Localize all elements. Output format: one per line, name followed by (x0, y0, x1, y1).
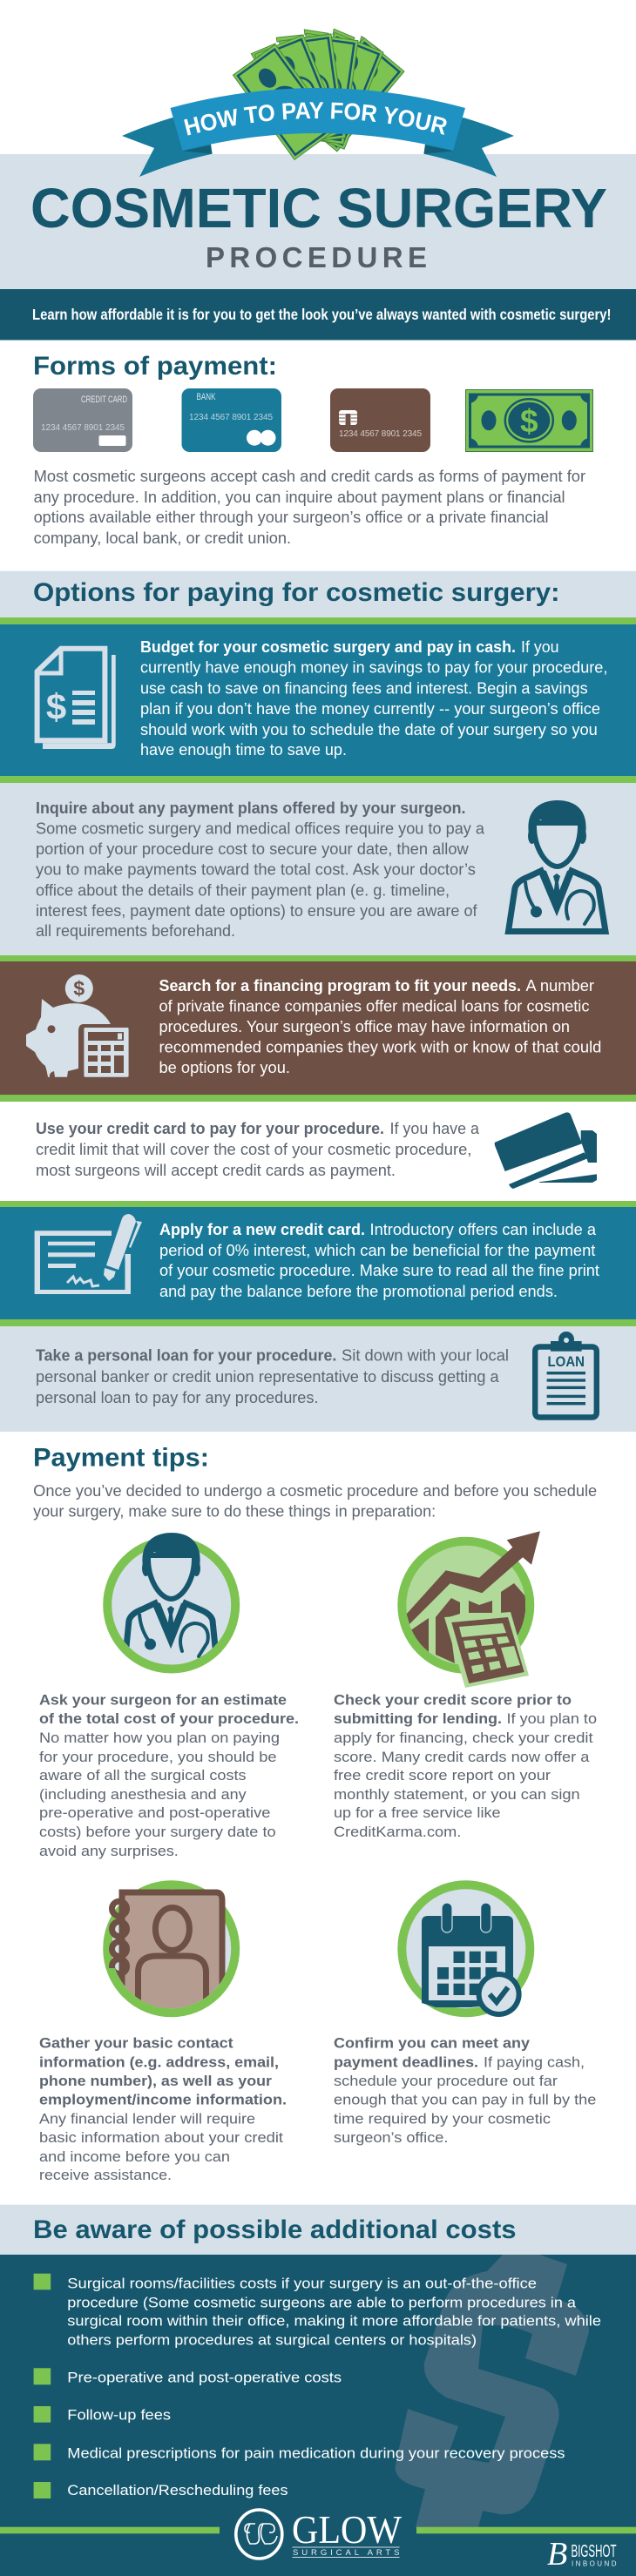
text block (159, 977, 601, 1076)
text block (34, 468, 585, 547)
text block: Take a personal loan for your procedure. (36, 1347, 336, 1365)
text block: Most cosmetic surgeons accept cash and credit cards as forms of payment for (34, 468, 585, 485)
icon: fan of money (233, 29, 404, 159)
tip text: surgeon’s office. (334, 2129, 448, 2146)
tip text: Ask your surgeon for an estimate (39, 1692, 287, 1709)
section: forms of payment (33, 352, 592, 547)
tip text: submitting for lending. (334, 1710, 502, 1727)
text block: any procedure. In addition, you can inquire about payment plans or financial (34, 489, 565, 506)
text block: Apply for a new credit card. (159, 1221, 365, 1238)
icon: calendar with check (402, 1885, 530, 2017)
icon: address book (107, 1885, 235, 2020)
tip text: enough that you can pay in full by the (334, 2092, 596, 2108)
icon: blue bank card: BANK (197, 392, 216, 402)
tip: contact information (39, 1885, 287, 2183)
text block: all requirements beforehand. (36, 922, 235, 940)
ribbon banner (122, 88, 514, 177)
text block: be options for you. (159, 1059, 290, 1076)
icon: loan clipboard: LOAN (547, 1353, 585, 1370)
logo: glow surgical arts (236, 2508, 402, 2559)
text block: Search for a financing program to fit your needs. (159, 977, 521, 995)
tip text: up for a free service like (334, 1804, 500, 1821)
tip text: of the total cost of your procedure. (39, 1710, 299, 1727)
tip text: avoid any surprises. (39, 1843, 179, 1859)
panel: surgeon payment plans (0, 776, 636, 955)
tip text (334, 1692, 597, 1840)
section heading: options: Options for paying for cosmetic surgery: (33, 578, 559, 607)
text block: portion of your procedure cost to secure your date, then allow (36, 840, 470, 858)
logo: bigshot inbound (547, 2536, 617, 2573)
intro text: Once you’ve decided to undergo a cosmetic procedure and before you schedule (33, 1482, 597, 1500)
icon: grey credit card: CREDIT CARD (81, 394, 127, 405)
heading: Forms of payment: (33, 352, 277, 381)
tip text: information (e.g. address, email, (39, 2054, 279, 2071)
text block: recommended companies they work with or know of that could (159, 1039, 601, 1056)
text block: personal banker or credit union representative to discuss getting a (36, 1368, 500, 1386)
panel: new credit card (0, 1201, 636, 1319)
icon: grey credit card (33, 388, 132, 452)
icon: piggy bank and calculator: $ (73, 977, 85, 1000)
text block: plan if you don’t have the money currently -- your surgeon’s office (140, 700, 600, 718)
text block: procedures. Your surgeon’s office may have information on (159, 1018, 570, 1035)
text block (36, 1120, 480, 1179)
icon: chart with calculator (402, 1531, 540, 1688)
intro text (33, 1482, 597, 1521)
tip text (334, 2035, 596, 2146)
text block (36, 1347, 509, 1406)
text block: should work with you to schedule the date of your surgery so you (140, 721, 598, 738)
icon: document with dollar: $ (46, 686, 66, 727)
tip text: schedule your procedure out far (334, 2073, 558, 2089)
tip text: If paying cash, (484, 2054, 585, 2071)
text block: A number (526, 977, 594, 995)
watermark dollar sign (396, 2255, 589, 2527)
text block: Budget for your cosmetic surgery and pay in cash. (140, 638, 516, 656)
text block: and pay the balance before the promotional period ends. (159, 1283, 558, 1300)
icon: document with dollar (37, 648, 116, 749)
bullet list (34, 2274, 601, 2498)
icon: dollar bill: $ (520, 403, 538, 439)
icon: piggy bank and calculator (26, 974, 129, 1077)
tip text: pre-operative and post-operative (39, 1804, 270, 1821)
bullet: facilities: surgical room within their office, making it more affordable for patients, while (67, 2313, 601, 2330)
text block: company, local bank, or credit union. (34, 529, 291, 547)
tip text (39, 1692, 299, 1859)
intro text: your surgery, make sure to do these things in preparation: (33, 1503, 436, 1521)
tip text: apply for financing, check your credit (334, 1730, 593, 1746)
intro banner (0, 289, 636, 341)
text block: Some cosmetic surgery and medical offices require you to pay a (36, 819, 485, 837)
icon: loan clipboard (535, 1332, 597, 1418)
header band (0, 28, 636, 289)
text block: credit limit that will cover the cost of your cosmetic procedure, (36, 1141, 471, 1158)
tip text: free credit score report on your (334, 1767, 551, 1784)
subtitle: PROCEDURE (206, 241, 427, 273)
tip text (39, 2035, 287, 2183)
tip text: and income before you can (39, 2148, 230, 2165)
bullet: facilities: others perform procedures at surgical centers or hospitals) (67, 2332, 477, 2349)
text block (140, 638, 607, 759)
tip text: payment deadlines. (334, 2054, 478, 2071)
icon: credit cards (495, 1112, 597, 1189)
tip text: basic information about your credit (39, 2129, 283, 2146)
tip: payment deadlines (334, 1885, 596, 2146)
tip text: for your procedure, you should be (39, 1749, 277, 1765)
text block: options available either through your surgeon’s office or a private financial (34, 509, 549, 526)
panel: personal loan (0, 1319, 636, 1432)
text block: currently have enough money in savings to pay for your procedure, (140, 659, 607, 677)
heading: Payment tips: (33, 1443, 209, 1472)
text block: interest fees, payment date options) to ensure you are aware of (36, 902, 477, 920)
icon: grey credit card: 1234 4567 8901 2345 (41, 423, 125, 433)
logo: glow surgical arts: GLOW (292, 2508, 402, 2552)
bullet: prescriptions: Medical prescriptions for pain medication during your recovery process (67, 2445, 565, 2461)
text block: you to make payments toward the total cost. Ask your doctor’s (36, 860, 476, 878)
logo: bigshot inbound: B (547, 2536, 567, 2573)
icon: blue bank card (181, 388, 281, 452)
icon: brown chip card (330, 388, 430, 452)
icon: blue bank card: 1234 4567 8901 2345 (189, 413, 273, 422)
bullet: follow-up: Follow-up fees (67, 2406, 171, 2423)
bullet: facilities: Surgical rooms/facilities costs if your surgery is an out-of-the-office (67, 2275, 537, 2291)
bullet: pre and post operative: Pre-operative and post-operative costs (67, 2369, 342, 2385)
panel: additional costs (0, 2255, 636, 2576)
tip text: No matter how you plan on paying (39, 1730, 280, 1746)
text block (36, 799, 485, 940)
tip text: aware of all the surgical costs (39, 1767, 247, 1784)
icon: dollar bill (465, 390, 592, 451)
tip text: Gather your basic contact (39, 2035, 233, 2052)
text block: Sit down with your local (342, 1347, 509, 1365)
text block: Use your credit card to pay for your procedure. (36, 1120, 384, 1137)
main title: COSMETIC SURGERY (30, 177, 607, 239)
ribbon title: HOW TO PAY FOR YOUR (184, 102, 447, 136)
tip text: costs) before your surgery date to (39, 1824, 276, 1840)
tip text: employment/income information. (39, 2092, 287, 2108)
section: payment tips (33, 1443, 597, 2183)
tip text: Confirm you can meet any (334, 2035, 531, 2052)
text block: have enough time to save up. (140, 741, 347, 759)
divider left (0, 2527, 220, 2533)
text block: Inquire about any payment plans offered by your surgeon. (36, 799, 465, 817)
text block (159, 1221, 599, 1300)
tip: surgeon estimate (39, 1533, 299, 1859)
tip text: Check your credit score prior to (334, 1692, 572, 1709)
section heading: additional costs (0, 2205, 636, 2255)
text block: Introductory offers can include a (369, 1221, 597, 1238)
text block: period of 0% interest, which can be beneficial for the payment (159, 1242, 595, 1259)
tip text: receive assistance. (39, 2167, 172, 2183)
text block: of your cosmetic procedure. Make sure to read all the fine print (159, 1262, 599, 1279)
bullet: facilities: procedure (Some cosmetic surgeons are able to perform procedures in a (67, 2294, 577, 2310)
divider right (416, 2527, 636, 2533)
bullet: follow-up (34, 2406, 171, 2423)
bullet: cancellation: Cancellation/Rescheduling fees (67, 2482, 288, 2498)
text block: personal loan to pay for any procedures. (36, 1389, 318, 1406)
icon: brown chip card: 1234 4567 8901 2345 (339, 429, 422, 439)
tip text: time required by your cosmetic (334, 2111, 551, 2128)
tip text: score. Many credit cards now offer a (334, 1749, 590, 1765)
tip text: CreditKarma.com. (334, 1824, 461, 1840)
tip text: Any financial lender will require (39, 2111, 255, 2128)
icon: signed contract and pen (35, 1214, 142, 1294)
panel: budget and pay in cash (0, 617, 636, 776)
tip text: monthly statement, or you can sign (334, 1786, 580, 1803)
icon: doctor (509, 800, 606, 932)
section heading: additional costs: Be aware of possible additional costs (33, 2215, 517, 2244)
icon: doctor in circle (107, 1533, 235, 1673)
bullet: facilities (34, 2274, 601, 2349)
text block: most surgeons will accept credit cards as payment. (36, 1162, 396, 1179)
text block: use cash to save on financing fees and interest. Begin a savings (140, 680, 588, 698)
text block: office about the details of their payment plan (e. g. timeline, (36, 881, 450, 899)
panel: use credit card (0, 1095, 636, 1189)
text block: of private finance companies offer medical loans for cosmetic (159, 998, 589, 1015)
tip: credit score (334, 1531, 597, 1840)
tip text: phone number), as well as your (39, 2073, 272, 2089)
panel: financing program (0, 955, 636, 1095)
logo: glow surgical arts: SURGICAL ARTS (293, 2548, 399, 2558)
tip text: (including anesthesia and any (39, 1786, 247, 1803)
logo: bigshot inbound: INBOUND (572, 2560, 617, 2568)
text block: If you (521, 638, 559, 656)
section heading: options (0, 571, 636, 617)
text block: If you have a (390, 1120, 480, 1137)
tip text: If you plan to (507, 1710, 597, 1727)
